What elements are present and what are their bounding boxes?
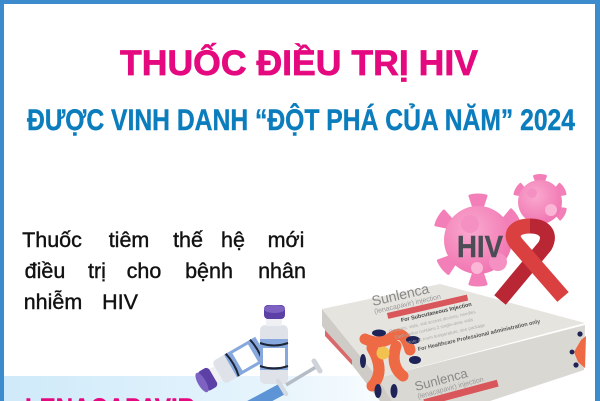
panel: bottom gradient band	[4, 376, 596, 401]
box label top: Contains: vials, vial access devices, needles	[389, 309, 477, 334]
text block: description: tiêm	[109, 228, 149, 252]
virus label: HIV	[457, 229, 503, 264]
text block: description: điều	[25, 259, 65, 283]
box label top	[370, 257, 542, 361]
icon: upright vial	[260, 305, 288, 384]
text block: description	[22, 228, 306, 314]
box label top: (lenacapavir) injection	[374, 294, 442, 316]
text block: description: trị	[88, 259, 106, 283]
box top face	[322, 284, 585, 378]
icon: large virus with HIV label	[435, 195, 520, 285]
box label top: For Healthcare Professional administration only	[417, 319, 542, 353]
title: line 1: THUỐC ĐIỀU TRỊ HIV	[120, 43, 479, 83]
box star pattern	[360, 330, 586, 398]
text block: description: mới	[268, 228, 304, 252]
text block: description: Thuốc	[22, 228, 82, 252]
text block: description: nhiễm	[24, 289, 82, 314]
box label front: (lenacapavir) injection	[417, 376, 484, 401]
icon: syringe	[245, 361, 320, 401]
text block: description: nhân	[258, 259, 306, 283]
text block: description: HIV	[102, 290, 139, 314]
icon: red ribbon	[500, 226, 563, 300]
box front face	[378, 325, 585, 401]
text block: description: bệnh	[185, 259, 233, 283]
box label front: Sunlenca	[413, 365, 470, 394]
icon: lying vial	[192, 337, 268, 396]
box label top: For Subcutaneous Injection	[400, 302, 473, 324]
box side stripe	[325, 330, 352, 365]
box label top: Each carton contains 2 single-dose vials	[394, 317, 474, 340]
icon: medicine box	[322, 257, 586, 401]
icon: small virus	[514, 175, 567, 224]
box label front	[413, 358, 499, 401]
text block: description: hệ	[221, 228, 245, 252]
text block: description: thế	[173, 228, 203, 252]
box label top: Store at room temperature, see package	[406, 322, 486, 345]
text block: description: cho	[127, 259, 161, 283]
box label top: Sunlenca	[370, 280, 431, 309]
box left side	[322, 309, 392, 401]
